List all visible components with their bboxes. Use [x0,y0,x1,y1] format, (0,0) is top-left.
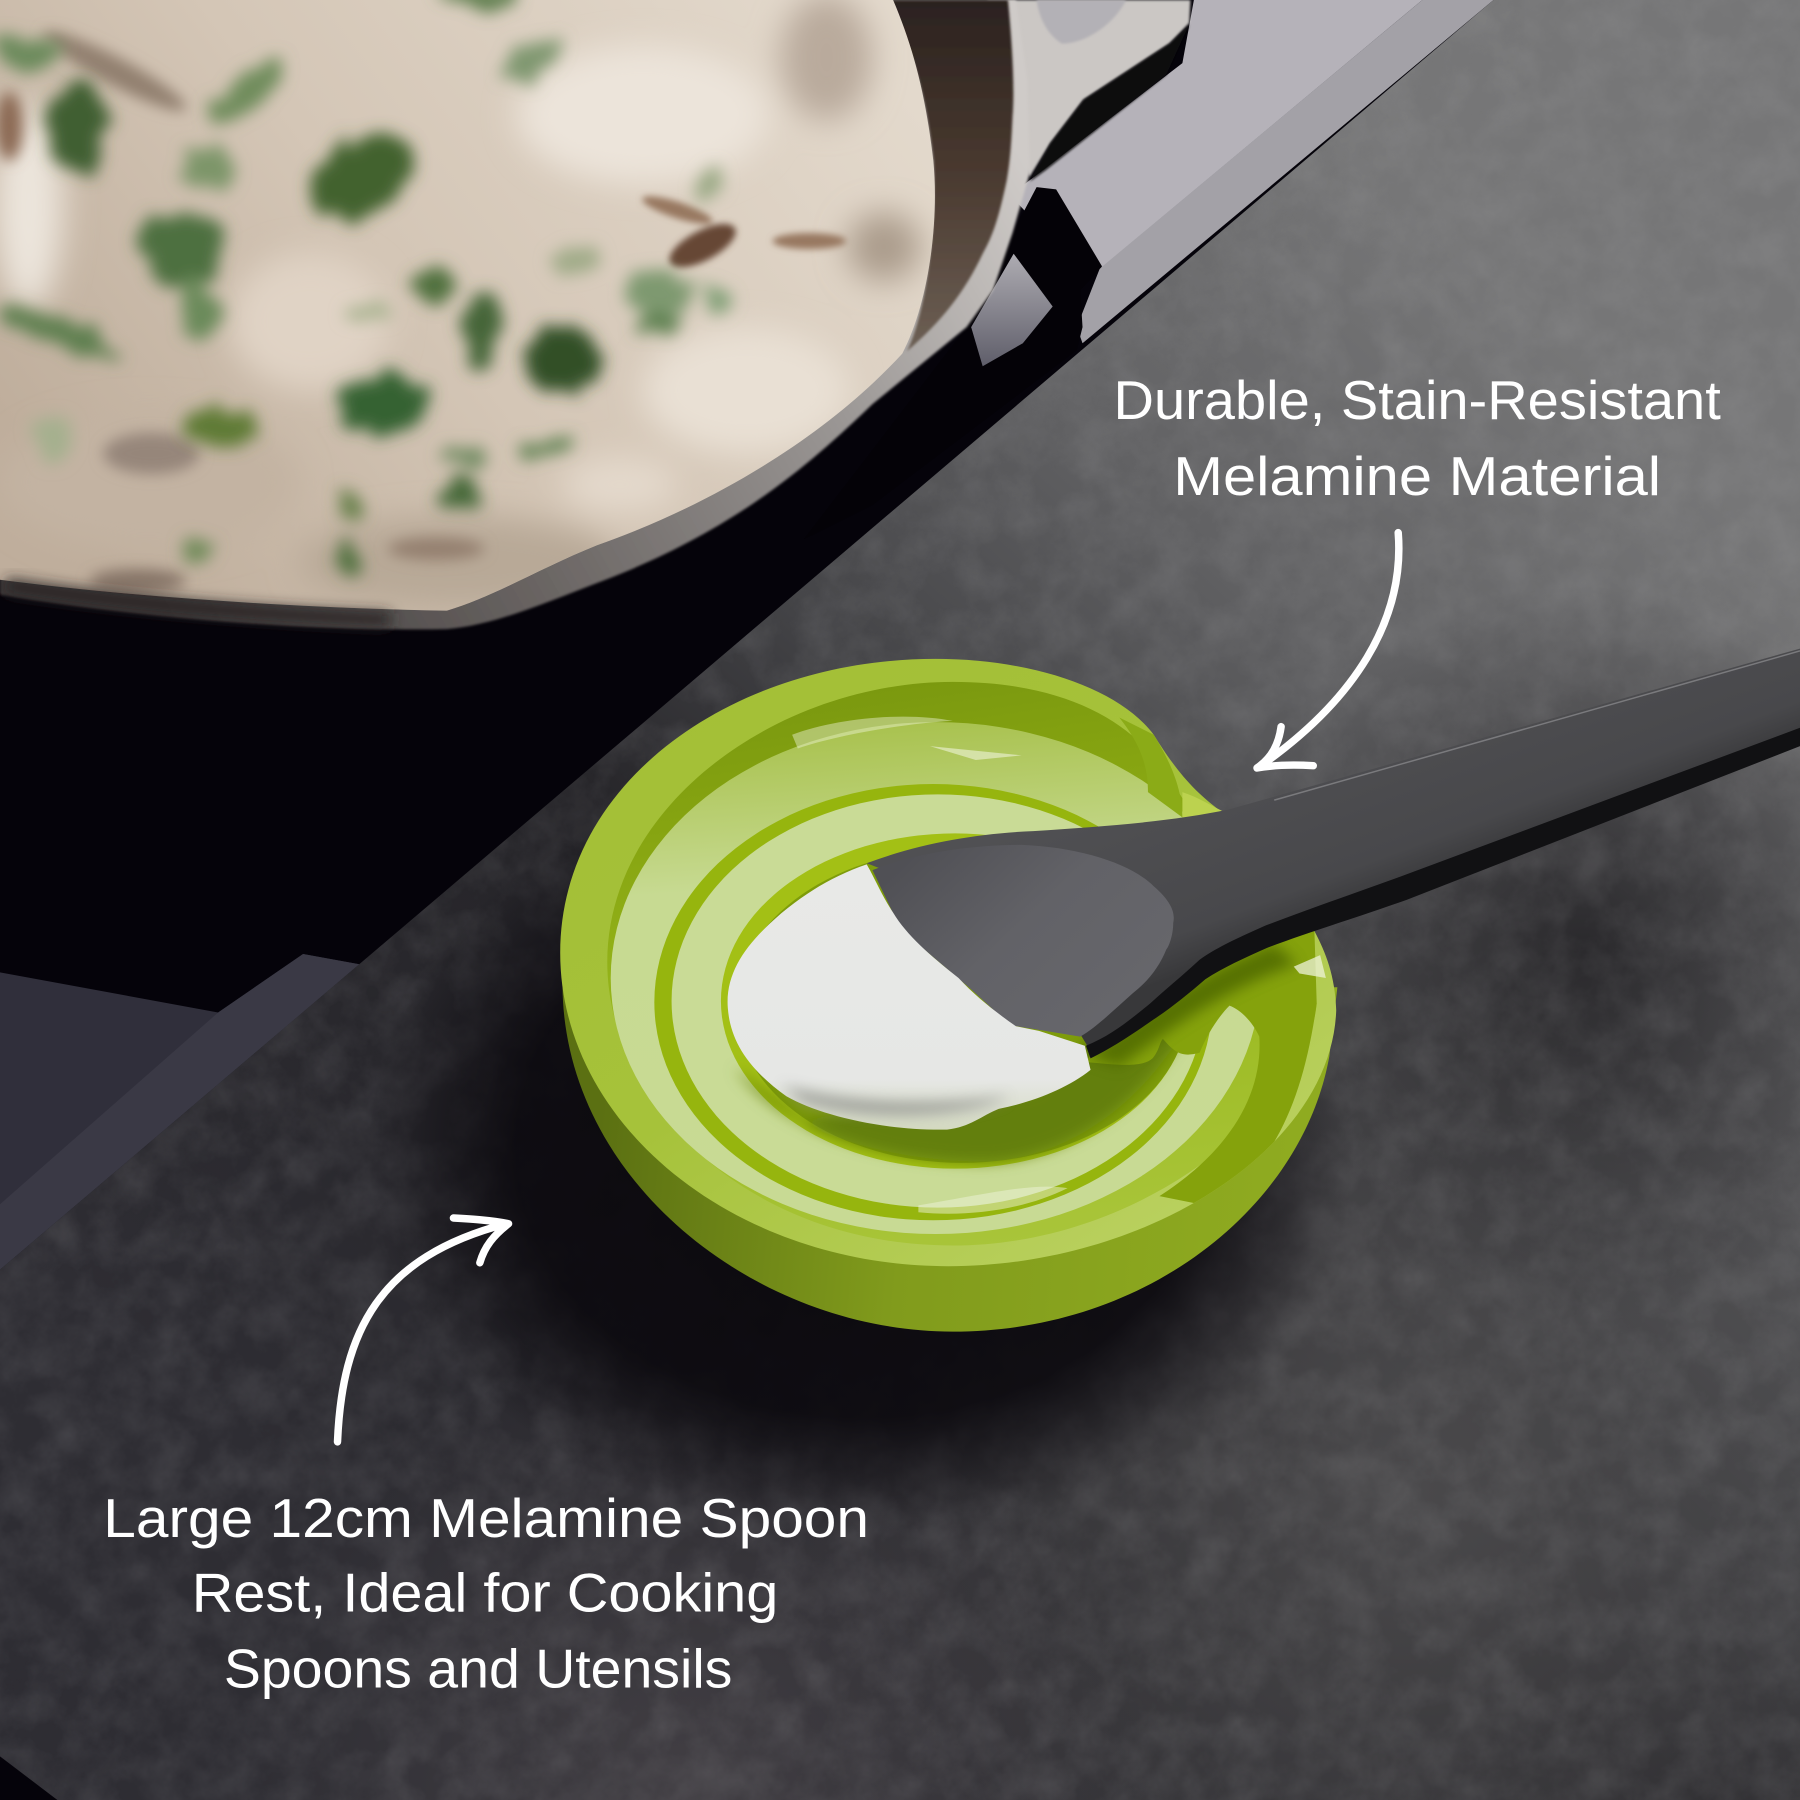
callout text [103,1487,869,1700]
callout text: Spoons and Utensils [224,1638,732,1700]
centre well [755,862,1178,1163]
outer wall [562,987,1337,1332]
callout text: Melamine Material [1173,445,1661,507]
skillet rim [0,0,1030,629]
green spoon rest [560,659,1337,1332]
gloss highlights [792,717,1326,1214]
arrow pointing to spoon rest [338,1218,509,1442]
stove seen through trivet opening [971,254,1053,366]
skillet handle [987,0,1190,181]
callout: durable material [1114,369,1721,768]
bowl cast shadow [399,873,1332,1514]
inner green groove [721,833,1189,1169]
callout: size [103,1218,869,1700]
soup swirl highlights [0,0,921,608]
lower handle edge [1086,728,1800,1058]
dip cream on spoon [728,864,1091,1130]
melamine spoon [728,649,1800,1130]
lower left stove surface [0,954,359,1270]
callout text: Durable, Stain-Resistant [1114,369,1721,431]
spoon scoop hollow [872,845,1174,1037]
inner wall [607,682,1317,1246]
chopped herbs [0,0,735,576]
arrow pointing to spoon rest [1257,533,1399,768]
out of focus near rim [6,585,390,620]
dark green pool under spoon [734,1039,1181,1172]
black pan trivet [804,187,1102,540]
handle top highlight line [1274,651,1800,800]
creamy soup [0,0,964,620]
callout text [1114,369,1721,507]
top rim [560,659,1336,1266]
board lighting [414,630,1800,1800]
skillet [0,0,1190,629]
cream shadow band [781,1085,1010,1115]
callout text: Rest, Ideal for Cooking [192,1562,778,1624]
spoon handle and head [867,649,1800,1049]
rim inner dark edge [1119,717,1182,817]
outer light band [611,722,1260,1234]
mushrooms [0,21,484,592]
notch lip highlight [1182,792,1226,822]
callout text: Large 12cm Melamine Spoon [103,1487,869,1549]
shadow across right bands [1085,907,1317,1208]
bowl interior [607,682,1326,1246]
inner light band [672,794,1204,1208]
light stove surface top right [1010,0,1493,343]
skillet inner wall [884,0,1013,351]
green groove [654,784,1212,1220]
